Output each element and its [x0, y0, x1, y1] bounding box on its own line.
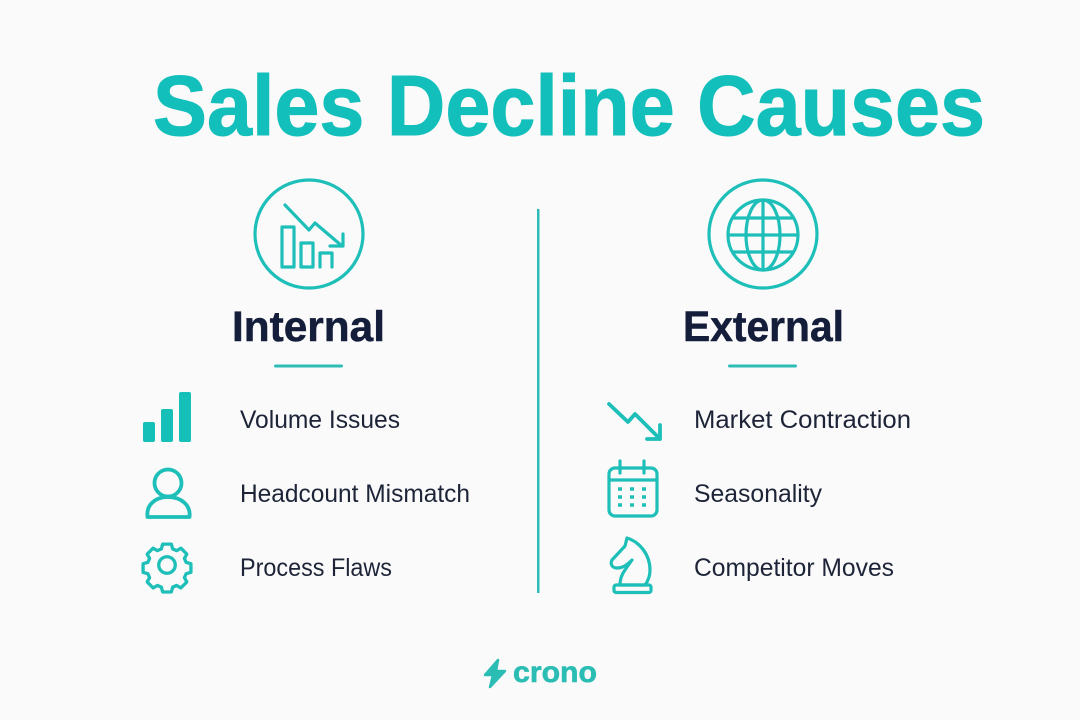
- panel: internal: [143, 180, 470, 592]
- label: Process Flaws: Process Flaws: [240, 554, 392, 582]
- label: Market Contraction: Market Contraction: [694, 406, 911, 434]
- panel: external: [609, 180, 911, 592]
- icon: signal bars: [143, 392, 191, 442]
- logo wordmark: crono: [513, 656, 597, 689]
- label: Seasonality: Seasonality: [694, 480, 822, 508]
- heading underline: [728, 364, 797, 368]
- divider: [537, 209, 540, 593]
- label: Volume Issues: Volume Issues: [240, 406, 400, 434]
- icon: calendar: [609, 461, 657, 516]
- icon: gear: [143, 544, 191, 592]
- logo: crono: [485, 656, 597, 689]
- heading underline: [274, 364, 343, 368]
- icon: lightning bolt: [485, 660, 505, 687]
- label: Headcount Mismatch: Headcount Mismatch: [240, 480, 470, 508]
- icon: person: [147, 470, 190, 517]
- label: Competitor Moves: Competitor Moves: [694, 554, 894, 582]
- title: Sales Decline Causes: [153, 59, 985, 154]
- icon: globe in circle: [709, 180, 817, 288]
- heading: External: External: [683, 303, 844, 351]
- heading: Internal: Internal: [232, 303, 385, 351]
- icon: declining bar chart in circle: [255, 180, 363, 288]
- icon: trending down arrow: [609, 404, 660, 439]
- icon: chess knight: [611, 538, 651, 592]
